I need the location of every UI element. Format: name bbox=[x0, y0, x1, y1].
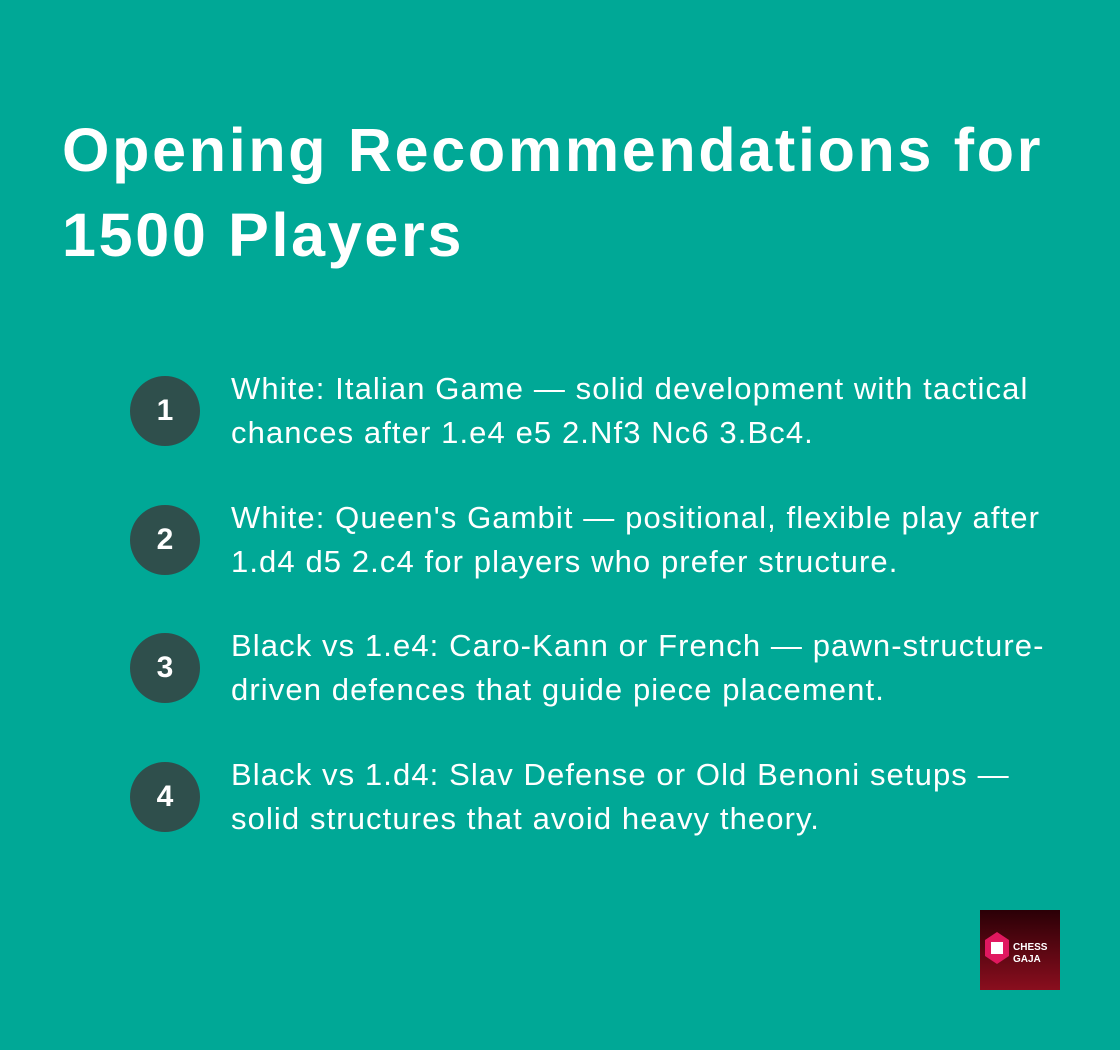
text 3: driven defences that guide piece placement. bbox=[231, 672, 885, 707]
badge 4: 4 bbox=[157, 780, 173, 813]
title: 1500 Players bbox=[62, 201, 464, 269]
badge 1: 1 bbox=[157, 394, 173, 427]
logo: GAJA bbox=[1013, 954, 1041, 965]
item 3 bbox=[130, 628, 1045, 707]
text 2: White: Queen's Gambit — positional, flexible play after bbox=[231, 500, 1040, 535]
item 4 bbox=[130, 757, 1010, 836]
title: Opening Recommendations for bbox=[62, 116, 1043, 184]
item 1 bbox=[130, 371, 1028, 450]
badge 2 bbox=[130, 505, 200, 575]
badge 3 bbox=[130, 633, 200, 703]
text 1: White: Italian Game — solid development with tactical bbox=[231, 371, 1028, 406]
logo: CHESS bbox=[1013, 942, 1048, 953]
item 2 bbox=[130, 500, 1040, 579]
badge 4 bbox=[130, 762, 200, 832]
text 4: Black vs 1.d4: Slav Defense or Old Benoni setups — bbox=[231, 757, 1010, 792]
text 3: Black vs 1.e4: Caro-Kann or French — pawn-structure- bbox=[231, 628, 1045, 663]
text 4: solid structures that avoid heavy theory. bbox=[231, 801, 820, 836]
text 4 bbox=[231, 757, 1010, 836]
text 1: chances after 1.e4 e5 2.Nf3 Nc6 3.Bc4. bbox=[231, 415, 814, 450]
logo bbox=[980, 910, 1060, 990]
text 2 bbox=[231, 500, 1040, 579]
badge 2: 2 bbox=[157, 523, 173, 556]
badge 1 bbox=[130, 376, 200, 446]
title bbox=[62, 116, 1043, 269]
text 2: 1.d4 d5 2.c4 for players who prefer structure. bbox=[231, 544, 898, 579]
badge 3: 3 bbox=[157, 651, 173, 684]
text 1 bbox=[231, 371, 1028, 450]
text 3 bbox=[231, 628, 1045, 707]
